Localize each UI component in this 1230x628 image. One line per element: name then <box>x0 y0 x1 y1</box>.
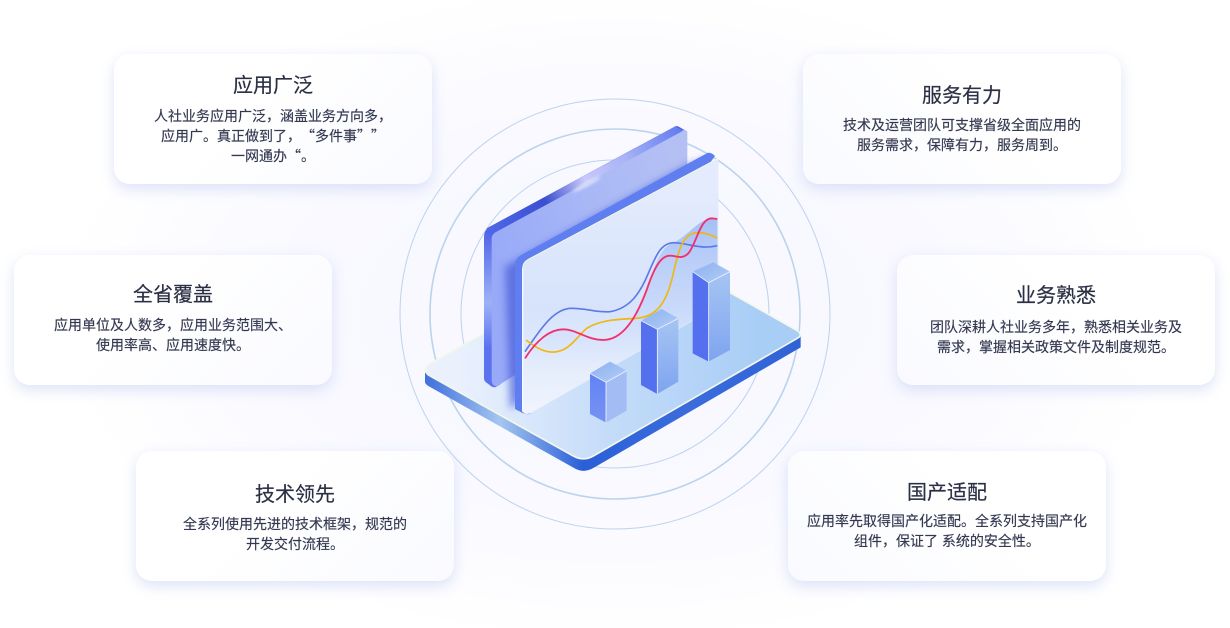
panel: 应用广泛 <box>114 54 432 184</box>
panel: 业务熟悉 <box>897 255 1215 385</box>
bar 2 <box>641 309 678 394</box>
front panel with line chart <box>505 153 718 414</box>
panel: 服务有力 <box>803 54 1121 184</box>
concentric rings <box>400 99 830 529</box>
heading: 国产适配: 国产适配 <box>907 482 987 504</box>
heading: 应用广泛: 应用广泛 <box>233 75 313 97</box>
heading: 服务有力: 服务有力 <box>922 85 1002 107</box>
line: blue <box>525 243 717 352</box>
heading: 全省覆盖: 全省覆盖 <box>133 284 213 306</box>
text block: 国产适配: 应用率先取得国产化适配。全系列支持国产化 组件，保证了 系统的安全性。 <box>807 513 1087 549</box>
line: red <box>525 218 717 358</box>
text block: 技术领先: 全系列使用先进的技术框架，规范的 开发交付流程。 <box>183 516 407 552</box>
bar 1 <box>590 362 627 423</box>
panel: 国产适配 <box>788 451 1106 581</box>
line: yellow <box>526 233 717 352</box>
panel: 全省覆盖 <box>14 255 332 385</box>
text block: 全省覆盖: 应用单位及人数多，应用业务范围大、 使用率高、应用速度快。 <box>54 317 292 353</box>
platform base <box>425 244 801 471</box>
heading: 技术领先: 技术领先 <box>255 484 335 506</box>
panel: 技术领先 <box>136 451 454 581</box>
bar 3 <box>693 262 730 362</box>
back panel <box>484 126 687 387</box>
text block: 业务熟悉: 团队深耕人社业务多年，熟悉相关业务及 需求，掌握相关政策文件及制度规范。 <box>930 319 1182 355</box>
chart area fill <box>525 218 717 373</box>
text block: 服务有力: 技术及运营团队可支撑省级全面应用的 服务需求，保障有力，服务周到。 <box>843 117 1081 153</box>
text block: 应用广泛: 人社业务应用广泛，涵盖业务方向多， 应用广。真正做到了，“多件事”” 一网通办“。 <box>154 108 392 166</box>
heading: 业务熟悉: 业务熟悉 <box>1016 285 1096 307</box>
